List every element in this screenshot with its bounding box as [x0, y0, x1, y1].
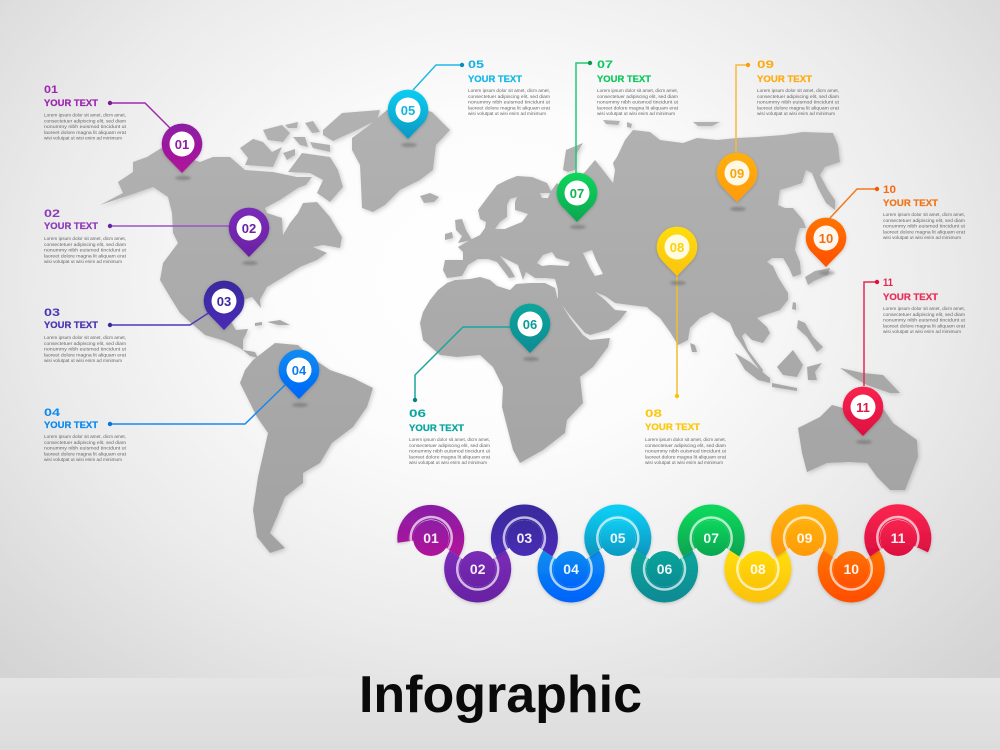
- step 03: [496, 510, 552, 556]
- world map: [100, 106, 918, 553]
- text block 07: consectetuer adipiscing elit, sed diam: [597, 94, 678, 99]
- text block 05: 05: [468, 59, 484, 71]
- text block 02: nonummy nibh euismod tincidunt ut: [44, 248, 127, 253]
- text block 07: [597, 59, 679, 116]
- connector 02: [108, 224, 230, 228]
- text block 09: 09: [757, 59, 774, 71]
- text block 10: nonummy nibh euismod tincidunt ut: [883, 224, 966, 229]
- text block 06: 06: [409, 408, 426, 420]
- map: Africa: [420, 277, 610, 463]
- text block 04: consectetuer adipiscing elit, sed diam: [44, 440, 126, 445]
- pin 11: [843, 387, 883, 444]
- map: Japan, Taiwan, Sri Lanka: [690, 268, 830, 352]
- map: North and Central America: [100, 147, 342, 358]
- map: Greenland: [352, 106, 450, 212]
- text block 02: [44, 208, 127, 264]
- text block 07: 07: [597, 59, 613, 71]
- text block 07: YOUR TEXT: [597, 74, 651, 85]
- connector 05: [413, 63, 464, 90]
- text block 04: 04: [44, 407, 61, 419]
- text block 05: nonummy nibh euismod tincidunt ut: [468, 100, 551, 105]
- step 11: [870, 510, 926, 556]
- text block 06: nonummy nibh euismod tincidunt ut: [409, 449, 491, 454]
- text block 11: consectetuer adipiscing elit, sed diam: [883, 312, 965, 317]
- text block 06: Lorem ipsum dolor sit amet, dicm amet,: [409, 437, 490, 442]
- text block 04: YOUR TEXT: [44, 420, 98, 431]
- text block 04: [44, 407, 127, 462]
- pin 03: [204, 281, 244, 330]
- text block 08: consectetuer adipiscing elit, sed diam: [645, 443, 726, 448]
- connector 01: [108, 101, 170, 128]
- text block 03: YOUR TEXT: [44, 320, 98, 331]
- text block 03: [44, 307, 127, 363]
- text block 02: laoreet dolore magna lit aliquam erat: [44, 253, 127, 258]
- text block 02: YOUR TEXT: [44, 221, 98, 232]
- text block 10: laoreet dolore magna lit aliquam erat: [883, 229, 966, 234]
- pin 01: 01: [175, 137, 189, 152]
- step 02: [450, 551, 506, 597]
- text block 03: Lorem ipsum dolor sit amet, dicm amet,: [44, 335, 126, 340]
- map: British Isles: [445, 219, 472, 243]
- text block 06: wisi volutpat ut wisi enim ad minimum: [409, 460, 487, 465]
- step 03: 03: [517, 530, 532, 546]
- text block 10: [883, 184, 966, 240]
- step 04: 04: [563, 561, 579, 577]
- text block 02: consectetuer adipiscing elit, sed diam: [44, 242, 126, 247]
- text block 11: laoreet dolore magna lit aliquam erat: [883, 323, 966, 328]
- pin 09: 09: [730, 166, 744, 181]
- connector 08: [675, 275, 679, 398]
- text block 08: wisi volutpat ut wisi enim ad minimum: [645, 460, 723, 465]
- step 02: 02: [470, 561, 486, 577]
- text block 06: laoreet dolore magna lit aliquam erat: [409, 454, 491, 459]
- text block 01: YOUR TEXT: [44, 98, 98, 109]
- text block 09: YOUR TEXT: [757, 74, 812, 85]
- pin 10: [806, 218, 846, 275]
- text block 03: consectetuer adipiscing elit, sed diam: [44, 341, 126, 346]
- map: Australia: [798, 405, 918, 490]
- text block 08: Lorem ipsum dolor sit amet, dicm amet,: [645, 437, 726, 442]
- step 11: 11: [891, 530, 906, 546]
- text block 06: YOUR TEXT: [409, 423, 464, 434]
- map: Caribbean islands: [255, 320, 290, 326]
- pin 06: [510, 304, 550, 361]
- connector 10: [830, 187, 879, 218]
- text block 09: Lorem ipsum dolor sit amet, dicm amet,: [757, 88, 839, 93]
- text block 07: wisi volutpat ut wisi enim ad minimum: [597, 111, 675, 116]
- map pins: [162, 90, 883, 444]
- pin 03: 03: [217, 294, 231, 309]
- text block 05: Lorem ipsum dolor sit amet, dicm amet,: [468, 88, 550, 93]
- text block 08: nonummy nibh euismod tincidunt ut: [645, 449, 727, 454]
- pin 02: [229, 208, 269, 265]
- text block 05: consectetuer adipiscing elit, sed diam: [468, 94, 550, 99]
- text blocks: [44, 59, 966, 465]
- text block 03: wisi volutpat ut wisi enim ad minimum: [44, 358, 122, 363]
- step 09: [777, 510, 833, 556]
- pin 07: 07: [570, 186, 584, 201]
- text block 02: wisi volutpat ut wisi enim ad minimum: [44, 259, 122, 264]
- text block 08: 08: [645, 408, 662, 420]
- text block 06: [409, 408, 491, 465]
- text block 05: YOUR TEXT: [468, 74, 522, 85]
- pin 06: 06: [523, 317, 537, 332]
- text block 06: consectetuer adipiscing elit, sed diam: [409, 443, 490, 448]
- text block 10: consectetuer adipiscing elit, sed diam: [883, 218, 965, 223]
- step 06: [637, 551, 692, 597]
- text block 09: nonummy nibh euismod tincidunt ut: [757, 100, 840, 105]
- connector 04: [108, 385, 285, 426]
- text block 04: Lorem ipsum dolor sit amet, dicm amet,: [44, 434, 126, 439]
- text block 05: laoreet dolore magna lit aliquam erat: [468, 105, 551, 110]
- connector lines: [108, 61, 879, 426]
- map: Iceland: [420, 193, 439, 203]
- pin 08: [657, 227, 697, 285]
- text block 01: consectetuer adipiscing elit, sed diam: [44, 118, 126, 123]
- text block 01: wisi volutpat ut wisi enim ad minimum: [44, 136, 122, 141]
- step 05: 05: [610, 530, 626, 546]
- text block 05: [468, 59, 551, 116]
- text block 09: wisi volutpat ut wisi enim ad minimum: [757, 111, 835, 116]
- text block 04: wisi volutpat ut wisi enim ad minimum: [44, 457, 122, 462]
- connector 09: [736, 63, 750, 155]
- pin 01: [162, 124, 202, 180]
- step 08: 08: [750, 561, 766, 577]
- text block 11: 11: [883, 277, 893, 289]
- text block 11: nonummy nibh euismod tincidunt ut: [883, 318, 966, 323]
- text block 01: 01: [44, 84, 58, 96]
- pin 04: 04: [292, 363, 307, 378]
- step 07: 07: [703, 530, 719, 546]
- text block 03: 03: [44, 307, 60, 319]
- map: Arctic islands: [240, 110, 380, 202]
- step 10: 10: [844, 561, 859, 577]
- pin 05: 05: [401, 103, 415, 118]
- step 10: [823, 551, 879, 597]
- step 06: 06: [657, 561, 672, 577]
- text block 01: Lorem ipsum dolor sit amet, dicm amet,: [44, 112, 126, 118]
- step 08: [730, 551, 786, 597]
- map: Southeast Asia islands: [735, 320, 823, 391]
- map: South America: [240, 343, 373, 553]
- title: Infographic: [359, 666, 642, 724]
- text block 10: 10: [883, 184, 896, 196]
- map: Eurasia: [443, 130, 840, 373]
- text block 04: laoreet dolore magna lit aliquam erat: [44, 451, 127, 456]
- step 09: 09: [797, 530, 813, 546]
- text block 09: consectetuer adipiscing elit, sed diam: [757, 94, 839, 99]
- text block 08: laoreet dolore magna lit aliquam erat: [645, 454, 727, 459]
- text block 01: [44, 84, 127, 141]
- connector 03: [108, 312, 210, 327]
- pin 07: [557, 173, 597, 229]
- connector 06: [413, 327, 511, 402]
- step 01: 01: [423, 530, 439, 546]
- pin 11: 11: [856, 400, 870, 415]
- pin 04: [279, 350, 319, 407]
- text block 11: Lorem ipsum dolor sit amet, dicm amet,: [883, 306, 965, 311]
- map: Novaya Zemlya and Arctic Russia islands: [563, 120, 720, 172]
- text block 10: YOUR TEXT: [883, 198, 938, 209]
- step 05: [590, 510, 646, 556]
- pin 05: [388, 90, 428, 147]
- pin 08: 08: [670, 240, 684, 255]
- step 04: [543, 551, 599, 597]
- text block 07: laoreet dolore magna lit aliquam erat: [597, 105, 679, 110]
- timeline wave 01 to 11: [403, 510, 926, 597]
- text block 02: Lorem ipsum dolor sit amet, dicm amet,: [44, 236, 126, 241]
- text block 07: Lorem ipsum dolor sit amet, dicm amet,: [597, 88, 678, 93]
- text block 10: Lorem ipsum dolor sit amet, dicm amet,: [883, 212, 965, 217]
- pin 09: [717, 153, 757, 211]
- text block 01: laoreet dolore magna lit aliquam erat: [44, 130, 127, 135]
- bottom title strip: [0, 678, 1000, 750]
- map: New Guinea: [840, 368, 900, 393]
- connector 11: [864, 280, 879, 386]
- text block 09: laoreet dolore magna lit aliquam erat: [757, 105, 840, 110]
- connector 07: [576, 61, 592, 174]
- text block 08: YOUR TEXT: [645, 422, 700, 433]
- step 01: [403, 510, 459, 556]
- text block 03: nonummy nibh euismod tincidunt ut: [44, 347, 127, 352]
- text block 11: [883, 277, 966, 334]
- text block 01: nonummy nibh euismod tincidunt ut: [44, 124, 127, 129]
- text block 03: laoreet dolore magna lit aliquam erat: [44, 352, 127, 357]
- text block 05: wisi volutpat ut wisi enim ad minimum: [468, 111, 546, 116]
- pin 02: 02: [242, 221, 256, 236]
- text block 11: YOUR TEXT: [883, 292, 938, 303]
- text block 10: wisi volutpat ut wisi enim ad minimum: [883, 235, 961, 240]
- text block 02: 02: [44, 208, 60, 220]
- text block 11: wisi volutpat ut wisi enim ad minimum: [883, 329, 961, 334]
- text block 07: nonummy nibh euismod tincidunt ut: [597, 100, 679, 105]
- step 07: [683, 510, 739, 556]
- text block 09: [757, 59, 840, 116]
- pin 10: 10: [819, 231, 833, 246]
- text block 08: [645, 408, 727, 465]
- text block 04: nonummy nibh euismod tincidunt ut: [44, 446, 127, 451]
